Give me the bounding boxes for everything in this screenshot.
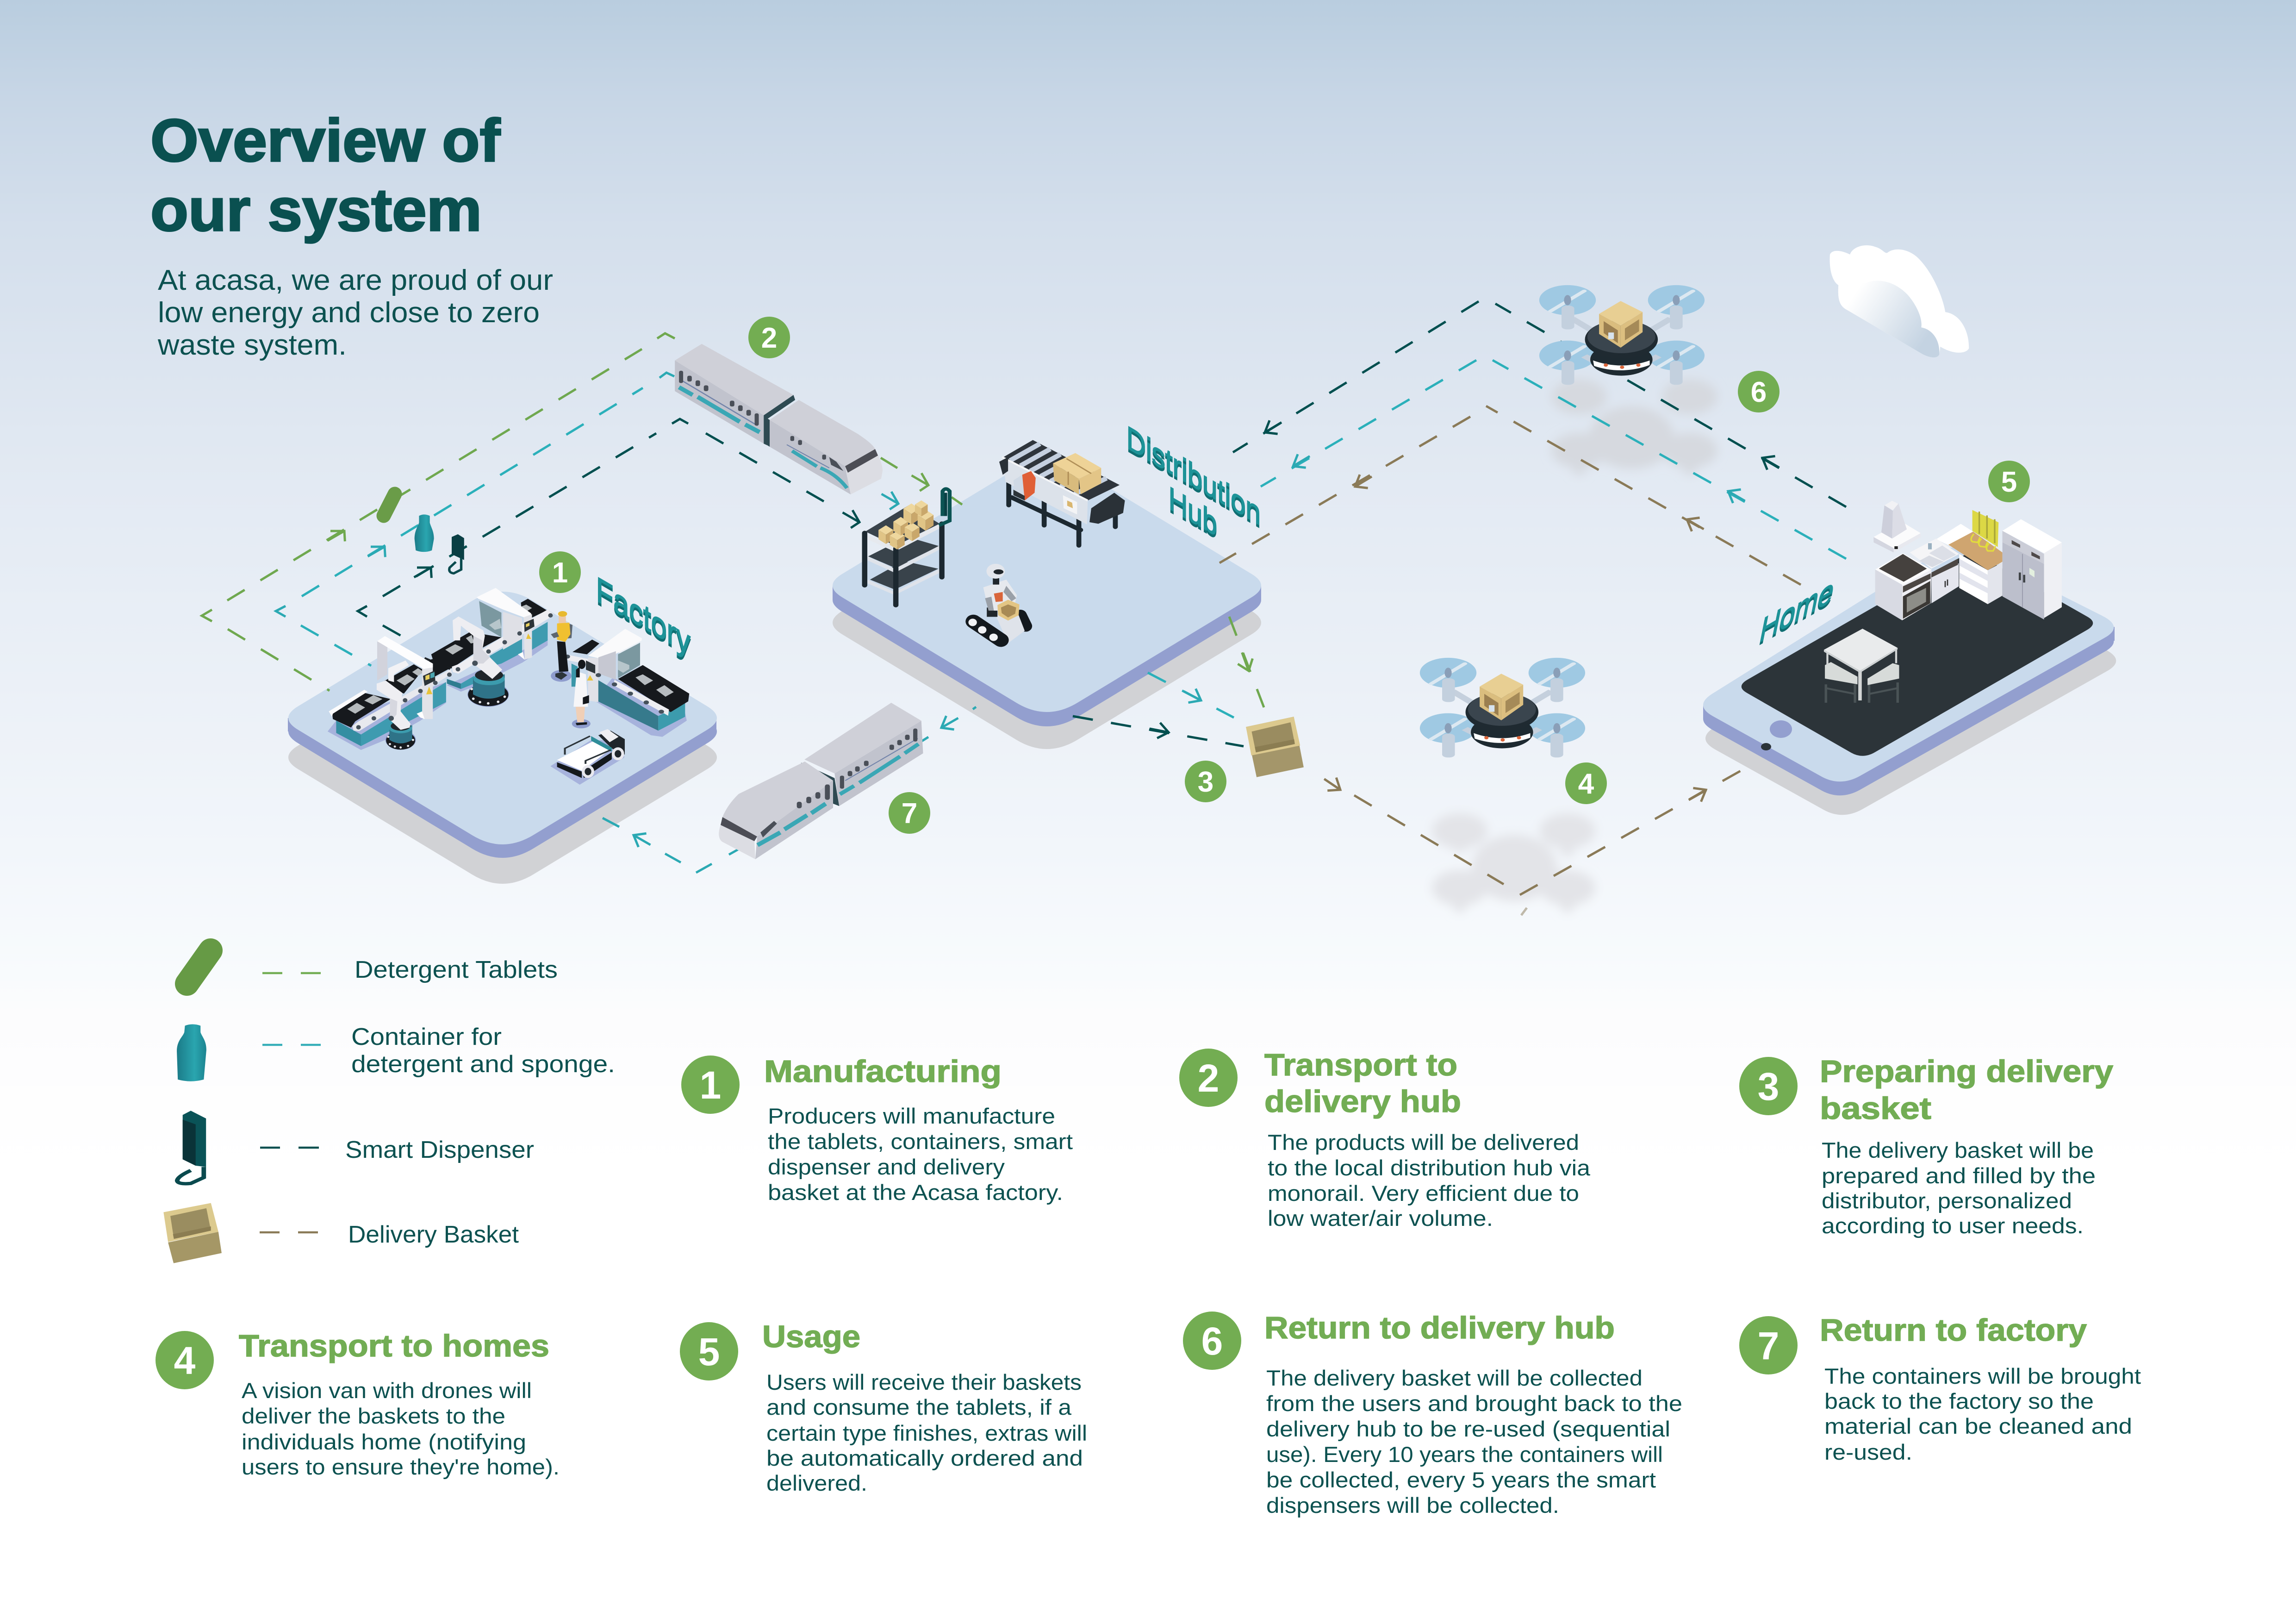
distribution hub scene [862,440,1125,643]
route: container (teal dashed) [276,373,1234,873]
step 6: return to delivery hub: Return to delivery hub [1264,1311,1615,1345]
label: Factory: Factory [596,569,691,663]
right conveyor [565,629,689,737]
route: delivery basket to home (brown dashed) [1320,768,1745,915]
legend [163,950,615,1263]
step 5: usage: 5 [698,1330,720,1374]
step 1: manufacturing [681,1054,1073,1205]
step 4: transport to homes: users to ensure they're home). [242,1455,560,1479]
kitchen furniture [1873,501,2062,620]
home kitchen scene [1824,501,2062,703]
icon: dispenser [449,534,464,574]
icon: container [415,514,434,552]
step 2: transport to delivery hub: low water/air volume. [1268,1206,1493,1230]
scene step markers: 1 [552,557,568,589]
step 6: return to delivery hub: delivery hub to be re-used (sequential [1266,1417,1670,1441]
legend item: container: detergent and sponge. [351,1051,615,1078]
cloud [1830,245,1969,357]
step 7: return to factory: Return to factory [1820,1313,2087,1348]
step 3: preparing delivery basket: basket [1820,1091,1931,1126]
step 4: transport to homes: Transport to homes [239,1329,549,1363]
step 6: return to delivery hub: The delivery basket will be collected [1266,1366,1643,1390]
legend item: container: Container for [351,1024,502,1050]
drone delivering (step 4) [1420,658,1585,757]
worker in yellow vest [551,611,572,682]
platform: distribution hub base [833,459,1261,749]
monorail train returning to factory [719,703,923,859]
step 6: return to delivery hub [1183,1311,1682,1518]
legend item: delivery basket: Delivery Basket [348,1221,519,1248]
step 5: usage: certain type finishes, extras will [766,1421,1087,1445]
conveyor with boxes [999,440,1125,545]
step 7: return to factory: The containers will be brought [1824,1364,2141,1388]
step 5: usage: delivered. [766,1471,867,1495]
route: smart dispenser (dark dashed) [358,419,1244,746]
drone shadows [1432,379,1717,912]
step 6: return to delivery hub: 6 [1201,1319,1223,1363]
step 2: transport to delivery hub: to the local distribution hub via [1268,1156,1591,1180]
scene step markers: 3 [1198,766,1213,798]
step 2: transport to delivery hub [1179,1048,1591,1230]
title: Overview of [150,106,501,174]
step 2: transport to delivery hub: Transport to [1264,1048,1457,1082]
step 3: preparing delivery basket: distributor, personalized [1822,1188,2072,1213]
scene step markers: 7 [902,798,917,830]
step 2: transport to delivery hub: The products will be delivered [1268,1130,1579,1155]
scene step markers: 2 [761,322,777,354]
left conveyor and small robot arm [328,636,452,750]
front carriage with nose [755,781,833,859]
step 3: preparing delivery basket: The delivery basket will be [1822,1138,2094,1162]
intro text [157,264,553,361]
scientist in white coat [572,660,591,728]
platform: factory base [288,592,717,884]
factory scene [328,588,689,785]
title: our system [150,176,482,244]
title [150,106,501,244]
step 5: usage: Users will receive their baskets [766,1370,1082,1394]
monorail train heading to hub [675,344,883,494]
rear carriage [675,344,795,445]
label: Distribution Hub: Distribution [1126,418,1261,533]
scene step markers: 5 [2001,466,2017,498]
autonomous cart [550,729,625,785]
delivery robot [968,564,1026,643]
label: Distribution Hub: Hub [1169,482,1217,546]
drone collecting (step 6) [1539,285,1705,385]
step 7: return to factory: 7 [1758,1324,1779,1368]
step 5: usage: be automatically ordered and [766,1446,1083,1470]
icon: tablet [384,494,395,516]
step 3: preparing delivery basket: 3 [1758,1065,1779,1108]
intro text: low energy and close to zero [158,297,540,329]
legend item: smart dispenser [177,1111,534,1184]
scene step markers: 4 [1578,768,1594,800]
step 4: transport to homes: deliver the baskets to the [242,1404,505,1428]
scene step markers [539,317,2030,834]
step 2: transport to delivery hub: delivery hub [1264,1084,1461,1119]
label: Home: Home [1757,569,1838,651]
step 7: return to factory: re-used. [1824,1440,1912,1464]
step 3: preparing delivery basket: according to user needs. [1822,1213,2084,1238]
step 4: transport to homes: A vision van with drones will [242,1378,532,1403]
label: Distribution Hub: Distribution [1126,421,1261,536]
step 1: manufacturing: Manufacturing [764,1054,1002,1089]
step 1: manufacturing: dispenser and delivery [768,1155,1005,1179]
legend item: detergent tablets: Detergent Tablets [355,956,558,983]
step 1: manufacturing: 1 [700,1063,721,1107]
step 2: transport to delivery hub: 2 [1198,1056,1219,1100]
step 5: usage: and consume the tablets, if a [766,1395,1072,1419]
legend item: smart dispenser: Smart Dispenser [345,1137,534,1163]
middle conveyor and robot arm [431,588,554,707]
intro text: At acasa, we are proud of our [158,264,553,296]
step 6: return to delivery hub: dispensers will be collected. [1266,1493,1559,1518]
rear carriage [801,703,923,806]
label: Distribution Hub: Hub [1169,479,1217,543]
step 4: transport to homes: individuals home (notifying [242,1430,526,1454]
delivery basket at hub [1246,717,1304,777]
step 1: manufacturing: Producers will manufacture [768,1104,1055,1128]
legend item: container [177,1024,615,1081]
platform: home smartphone [1703,547,2116,815]
step 6: return to delivery hub: from the users and brought back to the [1266,1391,1682,1416]
step 1: manufacturing: basket at the Acasa factory. [768,1180,1063,1205]
step 3: preparing delivery basket: Preparing delivery [1820,1054,2113,1089]
legend item: delivery basket [163,1203,519,1263]
scene step markers: 6 [1751,376,1767,408]
step 1: manufacturing: the tablets, containers, smart [768,1129,1073,1154]
route: detergent tablets (green dashed) [202,333,1264,707]
step 3: preparing delivery basket [1739,1054,2113,1238]
intro text: waste system. [157,329,347,361]
smart dispenser on rack [939,489,950,525]
step 5: usage [680,1319,1087,1495]
label: Factory: Factory [596,572,691,666]
step 6: return to delivery hub: be collected, every 5 years the smart [1266,1468,1656,1492]
step 7: return to factory: back to the factory so the [1824,1389,2094,1413]
step 7: return to factory [1739,1313,2141,1464]
label: Home: Home [1756,572,1837,654]
front carriage [770,420,851,494]
step 4: transport to homes [156,1329,560,1479]
factory products: tablet, container, dispenser [384,494,464,574]
step 5: usage: Usage [762,1319,860,1354]
step 2: transport to delivery hub: monorail. Very efficient due to [1268,1181,1579,1206]
legend item: detergent tablets [187,950,558,984]
dining table and chairs [1824,629,1899,703]
step 3: preparing delivery basket: prepared and filled by the [1822,1163,2096,1188]
step 6: return to delivery hub: use). Every 10 years the containers will [1266,1442,1663,1467]
shelving rack with boxes [862,500,943,605]
step 4: transport to homes: 4 [174,1339,196,1382]
route: return path to hub (dark, teal and brown dashed) [1220,301,1846,585]
step 7: return to factory: material can be cleaned and [1824,1414,2132,1438]
